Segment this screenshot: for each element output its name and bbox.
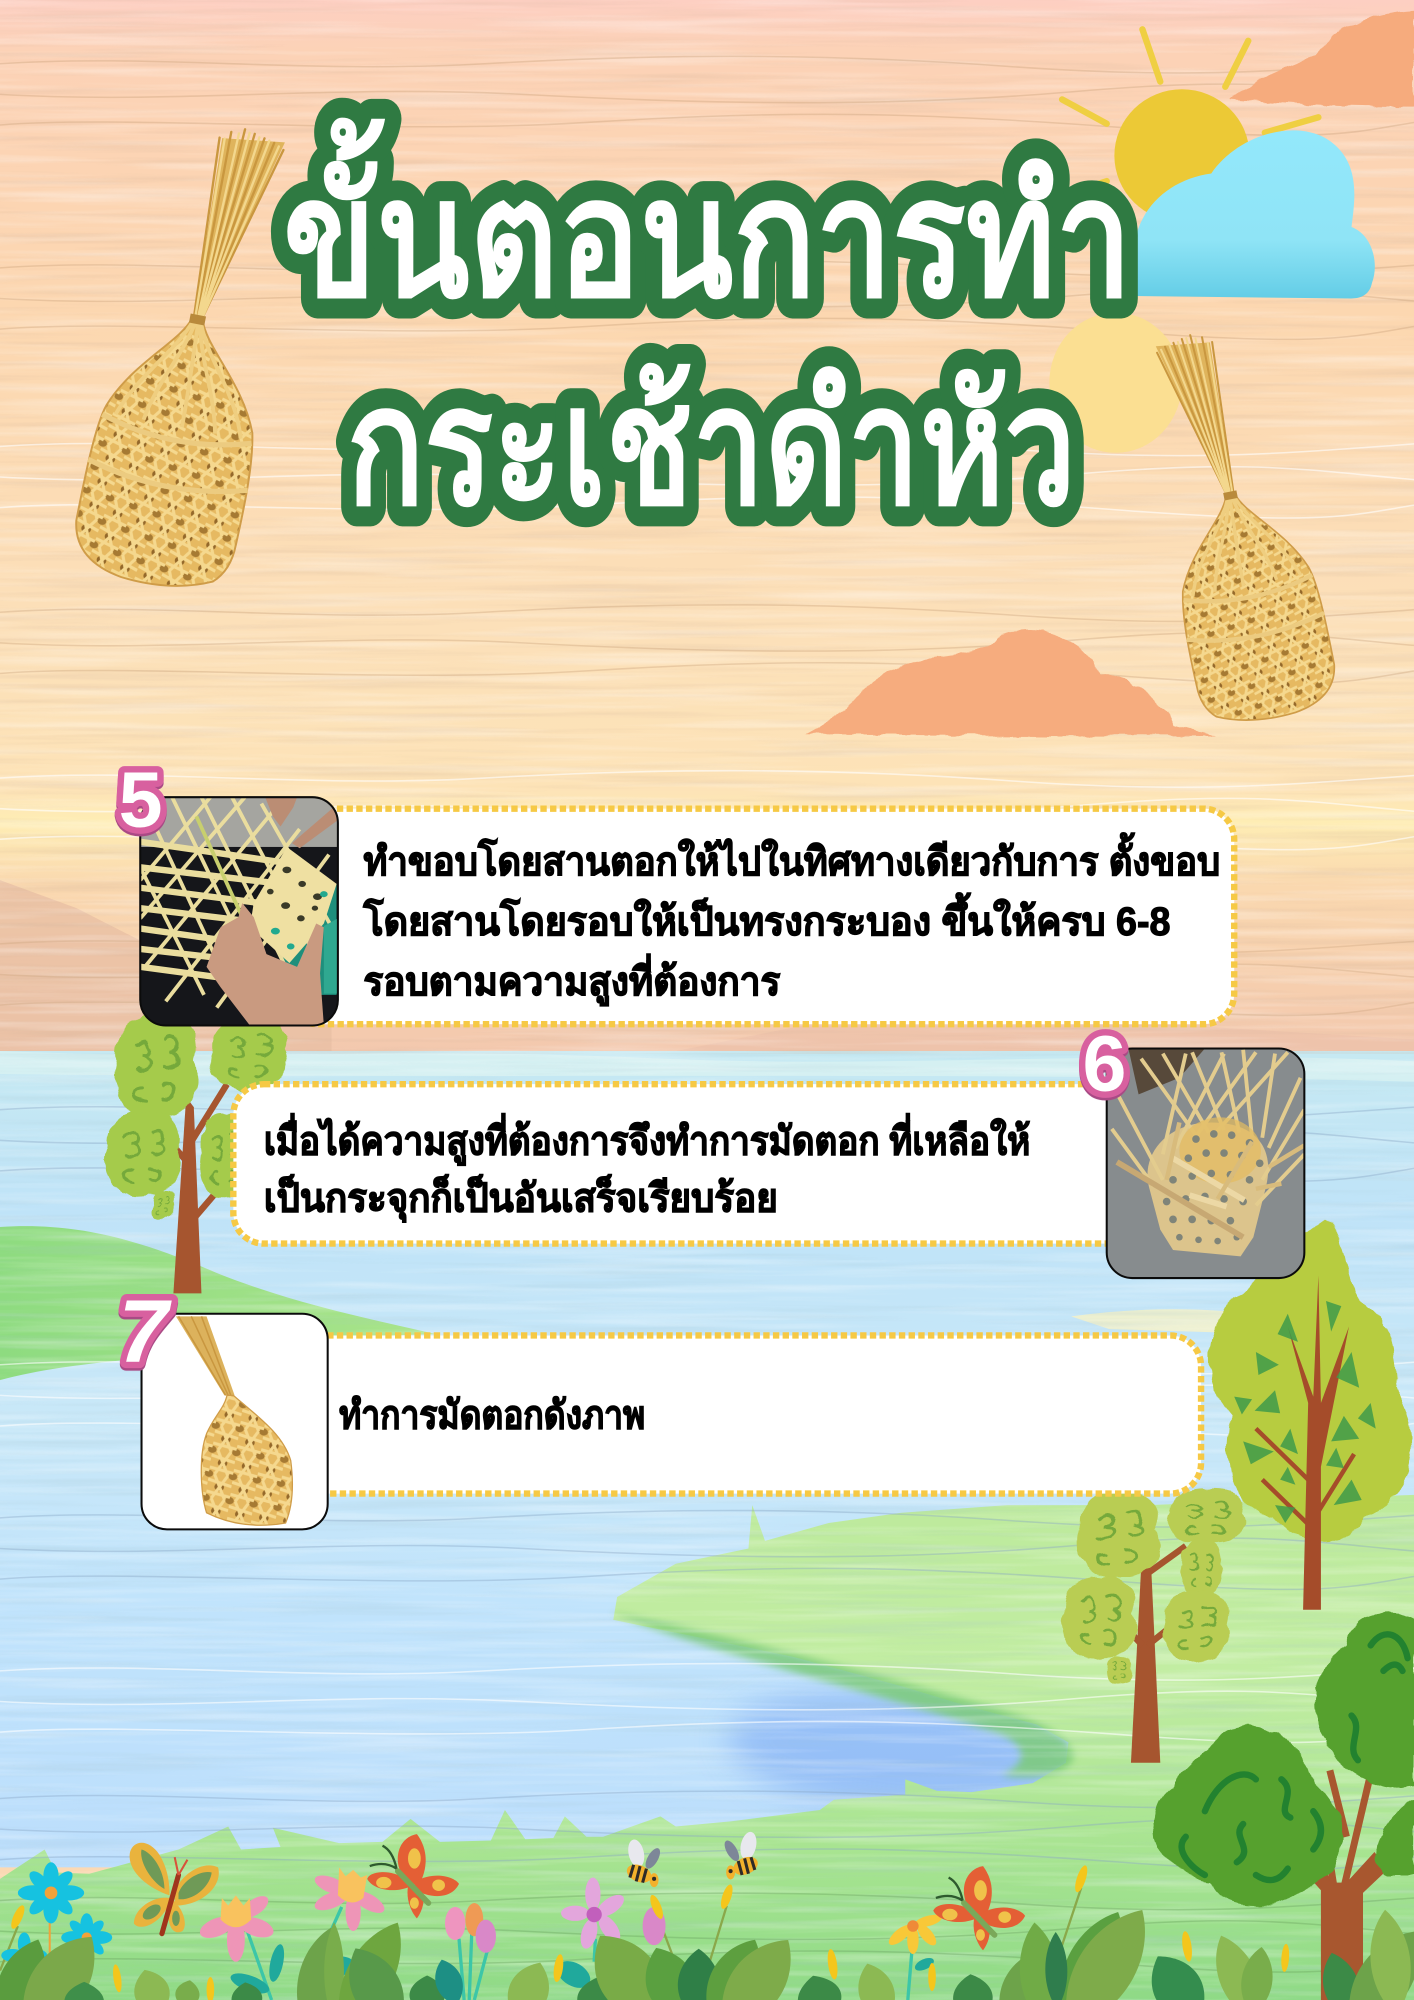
step 7 text: ทำการมัดตอกดังภาพ xyxy=(339,1394,645,1438)
orange cloud top right xyxy=(1229,10,1414,107)
step 6 text: เป็นกระจุกก็เป็นอันเสร็จเรียบร้อย xyxy=(264,1175,778,1223)
red butterflies xyxy=(367,1834,1025,1950)
orange stem for blue flowers xyxy=(49,1907,51,1958)
small tree left xyxy=(106,1014,288,1293)
small pink flower xyxy=(643,1907,666,1945)
step 5 text xyxy=(362,832,1220,1006)
yellow flower xyxy=(886,1912,943,1954)
left green hill xyxy=(0,1226,436,1380)
step 6 text: เมื่อได้ความสูงที่ต้องการจึงทำการมัดตอก ที่เหลือให้ xyxy=(264,1112,1030,1165)
step 7 text box xyxy=(287,1335,1201,1494)
step 5 text: ทำขอบโดยสานตอกให้ไปในทิศทางเดียวกับการ ตั้งขอบ xyxy=(363,832,1220,884)
blue flower three xyxy=(1,1932,47,1978)
foreground leaves xyxy=(0,1895,1414,2000)
big light-green tree right xyxy=(1209,1218,1412,1610)
shoreline shading xyxy=(611,1612,1074,1777)
pink flower one xyxy=(197,1892,276,1962)
step 6 number badge: 6 xyxy=(1082,1019,1126,1108)
yellow grass buds xyxy=(9,1864,1290,2000)
step 6 text xyxy=(264,1112,1030,1223)
title line two: กระเช้าดำหัว xyxy=(347,354,1076,539)
basket right xyxy=(1130,320,1342,731)
olive tree right xyxy=(1063,1489,1245,1763)
bud stems xyxy=(0,1888,1081,1971)
orange cloud middle xyxy=(806,631,1218,736)
pink flower two xyxy=(312,1867,388,1931)
step 5 text: โดยสานโดยรอบให้เป็นทรงกระบอง ขึ้นให้ครบ 6-8 xyxy=(362,892,1170,944)
title xyxy=(283,117,1132,539)
flowers xyxy=(0,1862,1081,2000)
step 5 number badge: 5 xyxy=(119,755,163,844)
title line one: ขั้นตอนการทำ xyxy=(283,117,1132,331)
step 7 number badge: 7 xyxy=(119,1281,173,1381)
step 5 text: รอบตามความสูงที่ต้องการ xyxy=(363,953,780,1006)
blue flower two xyxy=(61,1913,112,1962)
blue flower one xyxy=(18,1862,84,1923)
teal leaves xyxy=(228,1943,936,1998)
sun xyxy=(1062,29,1318,222)
bees xyxy=(624,1830,760,1887)
flower stems xyxy=(247,1907,913,2000)
step 6 photo: unfinished basket xyxy=(1107,1048,1304,1278)
step 7 photo: finished basket xyxy=(142,1314,328,1529)
pale yellow sun xyxy=(1049,312,1182,453)
purple flower xyxy=(561,1878,628,1950)
dark green trees bottom right xyxy=(1153,1613,1414,2000)
left butterfly xyxy=(130,1843,219,1934)
step 5 xyxy=(119,755,1234,1026)
step 6 text box xyxy=(233,1084,1154,1244)
right land and foreground meadow xyxy=(0,1495,1414,2000)
blue cloud xyxy=(1122,130,1375,298)
tulips xyxy=(445,1903,496,1953)
basket left xyxy=(67,112,315,599)
step 5 text box xyxy=(287,809,1234,1024)
step 7 xyxy=(119,1281,1201,1529)
step 6 xyxy=(233,1019,1304,1278)
step 5 photo: hands weaving bamboo xyxy=(140,797,338,1026)
